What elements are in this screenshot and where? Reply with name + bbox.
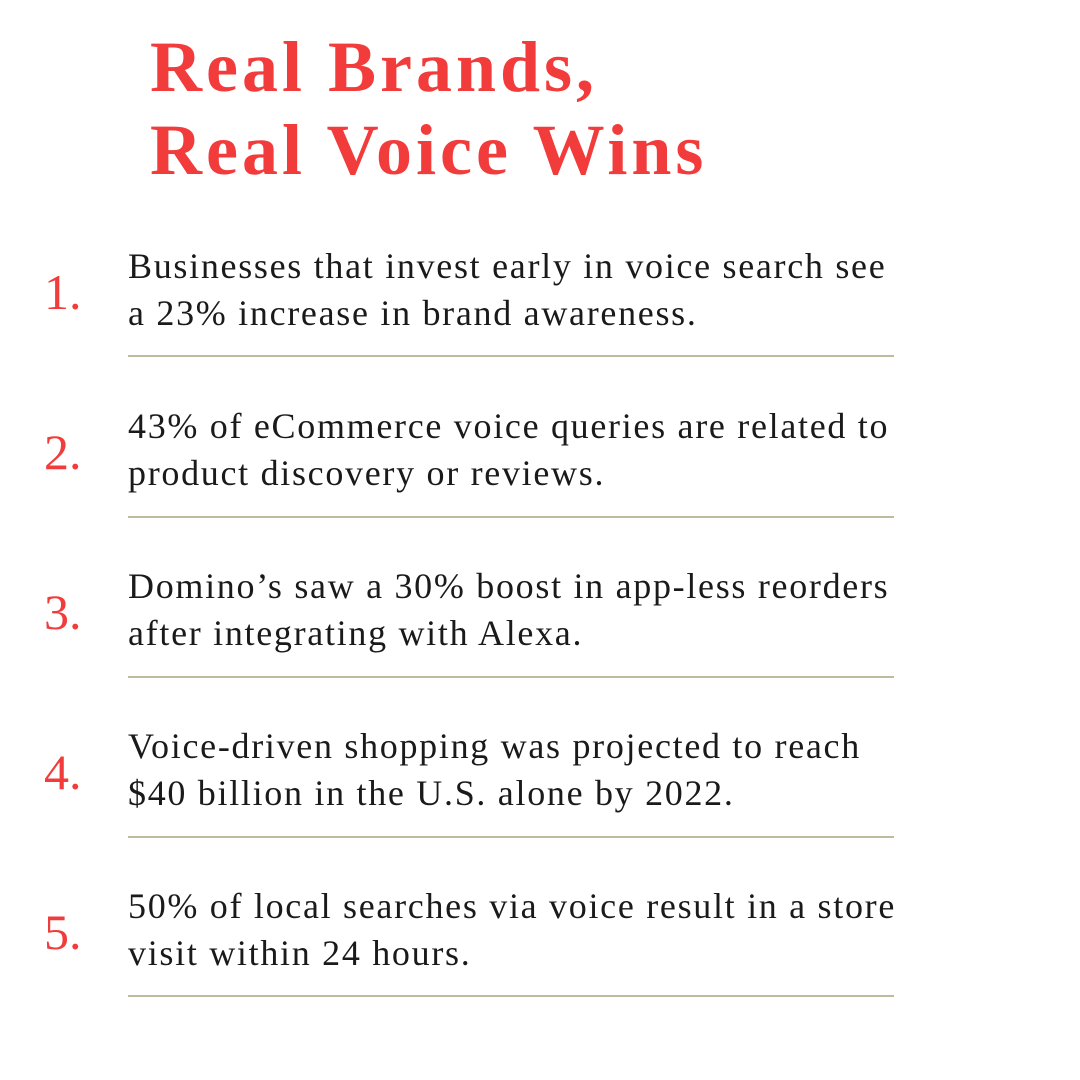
text 2: 43% of eCommerce voice queries are related to <box>128 406 889 446</box>
text 5 <box>128 886 896 973</box>
item 5 <box>44 886 896 973</box>
text 5: 50% of local searches via voice result in a store <box>128 886 896 926</box>
number 5: 5. <box>44 904 82 960</box>
text 3 <box>128 566 889 653</box>
text 2 <box>128 406 889 493</box>
title: Real Voice Wins <box>150 110 707 190</box>
title <box>150 27 707 190</box>
number 1: 1. <box>44 264 82 320</box>
text 1 <box>128 246 886 333</box>
item 3 <box>44 566 889 653</box>
title: Real Brands, <box>150 27 598 107</box>
text 1: a 23% increase in brand awareness. <box>128 293 698 333</box>
item 2 <box>44 406 889 493</box>
text 5: visit within 24 hours. <box>128 933 471 973</box>
text 4 <box>128 726 861 813</box>
text 4: Voice-driven shopping was projected to reach <box>128 726 861 766</box>
number 2: 2. <box>44 424 82 480</box>
text 1: Businesses that invest early in voice search see <box>128 246 886 286</box>
item 1 <box>44 246 886 333</box>
item 4 <box>44 726 861 813</box>
number 3: 3. <box>44 584 82 640</box>
text 3: Domino’s saw a 30% boost in app-less reorders <box>128 566 889 606</box>
text 3: after integrating with Alexa. <box>128 613 583 653</box>
number 4: 4. <box>44 744 82 800</box>
text 2: product discovery or reviews. <box>128 453 605 493</box>
text 4: $40 billion in the U.S. alone by 2022. <box>128 773 735 813</box>
